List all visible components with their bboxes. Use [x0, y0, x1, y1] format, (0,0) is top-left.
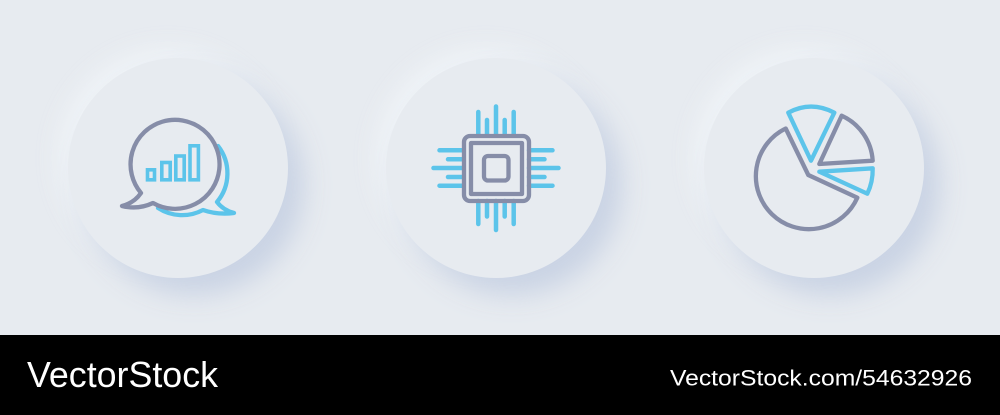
panel: middle circle button	[386, 58, 606, 278]
panel: right circle button	[704, 58, 924, 278]
icon: microchip	[434, 106, 558, 230]
image id: VectorStock.com/54632926: VectorStock.com/54632926	[670, 366, 972, 390]
icon: speech bubbles with bar chart	[122, 120, 234, 215]
panel: left circle button	[68, 58, 288, 278]
icon: pie chart	[756, 107, 873, 229]
footer band	[0, 335, 1000, 415]
logo: VectorStock: VectorStock	[27, 354, 219, 395]
